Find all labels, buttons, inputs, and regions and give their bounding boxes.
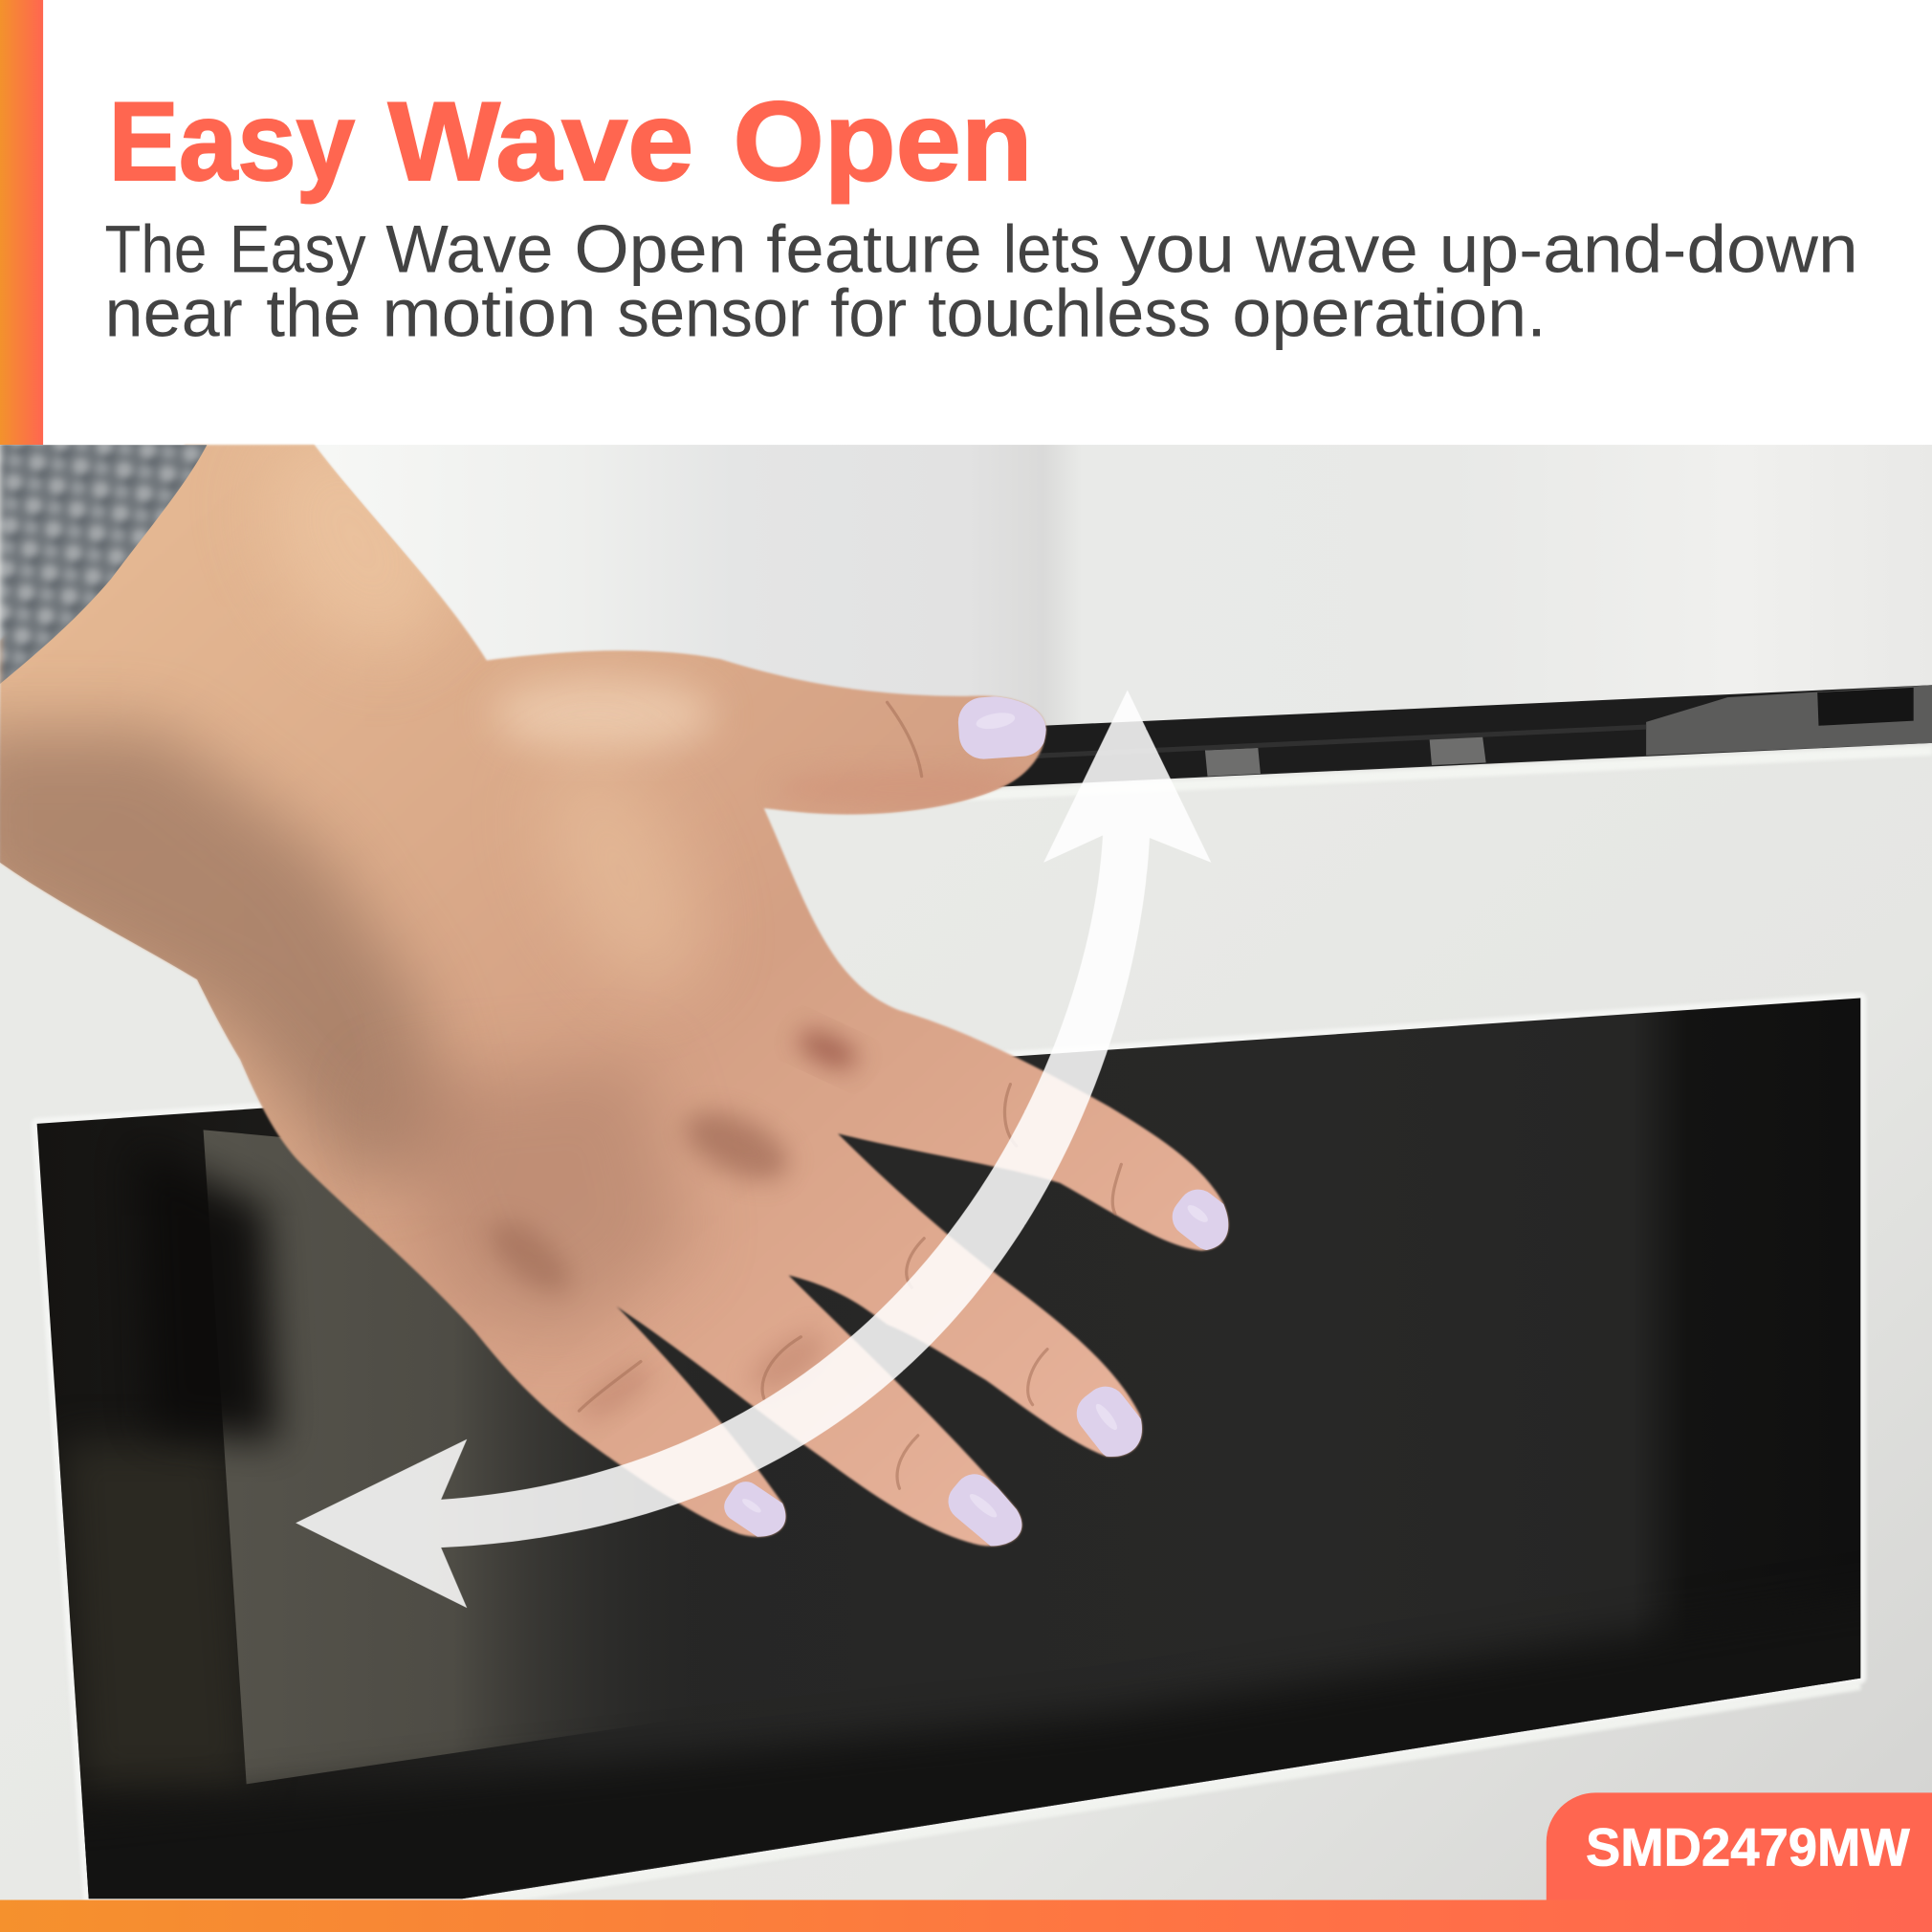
title: Easy (108, 78, 355, 204)
lower hand shadow (369, 1060, 690, 1343)
lower glass shadow (82, 1586, 1861, 1899)
description text: touchless (928, 276, 1211, 352)
photo: microwave drawer with hand (0, 401, 1932, 1932)
thumb underside tint (821, 771, 1025, 814)
description text: motion (382, 276, 597, 352)
description text: Open (574, 212, 747, 288)
model number: SMD2479MW (1586, 1817, 1911, 1877)
nails (718, 693, 1243, 1558)
motion arrow (296, 690, 1211, 1608)
knit sleeve (0, 445, 207, 684)
wrist shadow band (0, 727, 456, 1183)
knuckle tints (793, 1024, 863, 1076)
title: Open (734, 78, 1033, 204)
title: Wave (388, 78, 693, 204)
header panel (0, 0, 1932, 445)
door bottom lip (487, 1685, 1860, 1901)
model badge (1547, 1792, 1932, 1900)
door highlight lip below slot (936, 745, 1932, 802)
title (108, 78, 1033, 204)
description text: up-and-down (1439, 212, 1858, 288)
highlights (284, 445, 440, 644)
left accent bar (0, 0, 43, 445)
dark reflection blob (136, 1146, 277, 1441)
steel upper panel (0, 445, 1932, 765)
description text: for (830, 276, 907, 352)
nail highlights (740, 710, 1211, 1521)
sensor slot (961, 685, 1932, 788)
description text: you (1120, 212, 1235, 288)
description text: Easy (230, 212, 366, 288)
description text: operation. (1232, 276, 1547, 352)
description text: The (105, 212, 207, 288)
mesh interior (203, 1130, 597, 1785)
bottom gradient bar (0, 1900, 1932, 1932)
description text: wave (1255, 212, 1418, 288)
description text: near (105, 276, 243, 352)
hand (0, 401, 1243, 1558)
description text: Wave (385, 212, 553, 288)
door panel (0, 743, 1932, 1932)
description text: feature (766, 212, 982, 288)
description text: sensor (617, 276, 809, 352)
description text (105, 212, 1858, 352)
description text: lets (1003, 212, 1100, 288)
oven window glass (0, 998, 1922, 1932)
lower left glass tint (61, 1441, 252, 1787)
knuckle creases (579, 702, 1121, 1488)
description text: the (266, 276, 361, 352)
